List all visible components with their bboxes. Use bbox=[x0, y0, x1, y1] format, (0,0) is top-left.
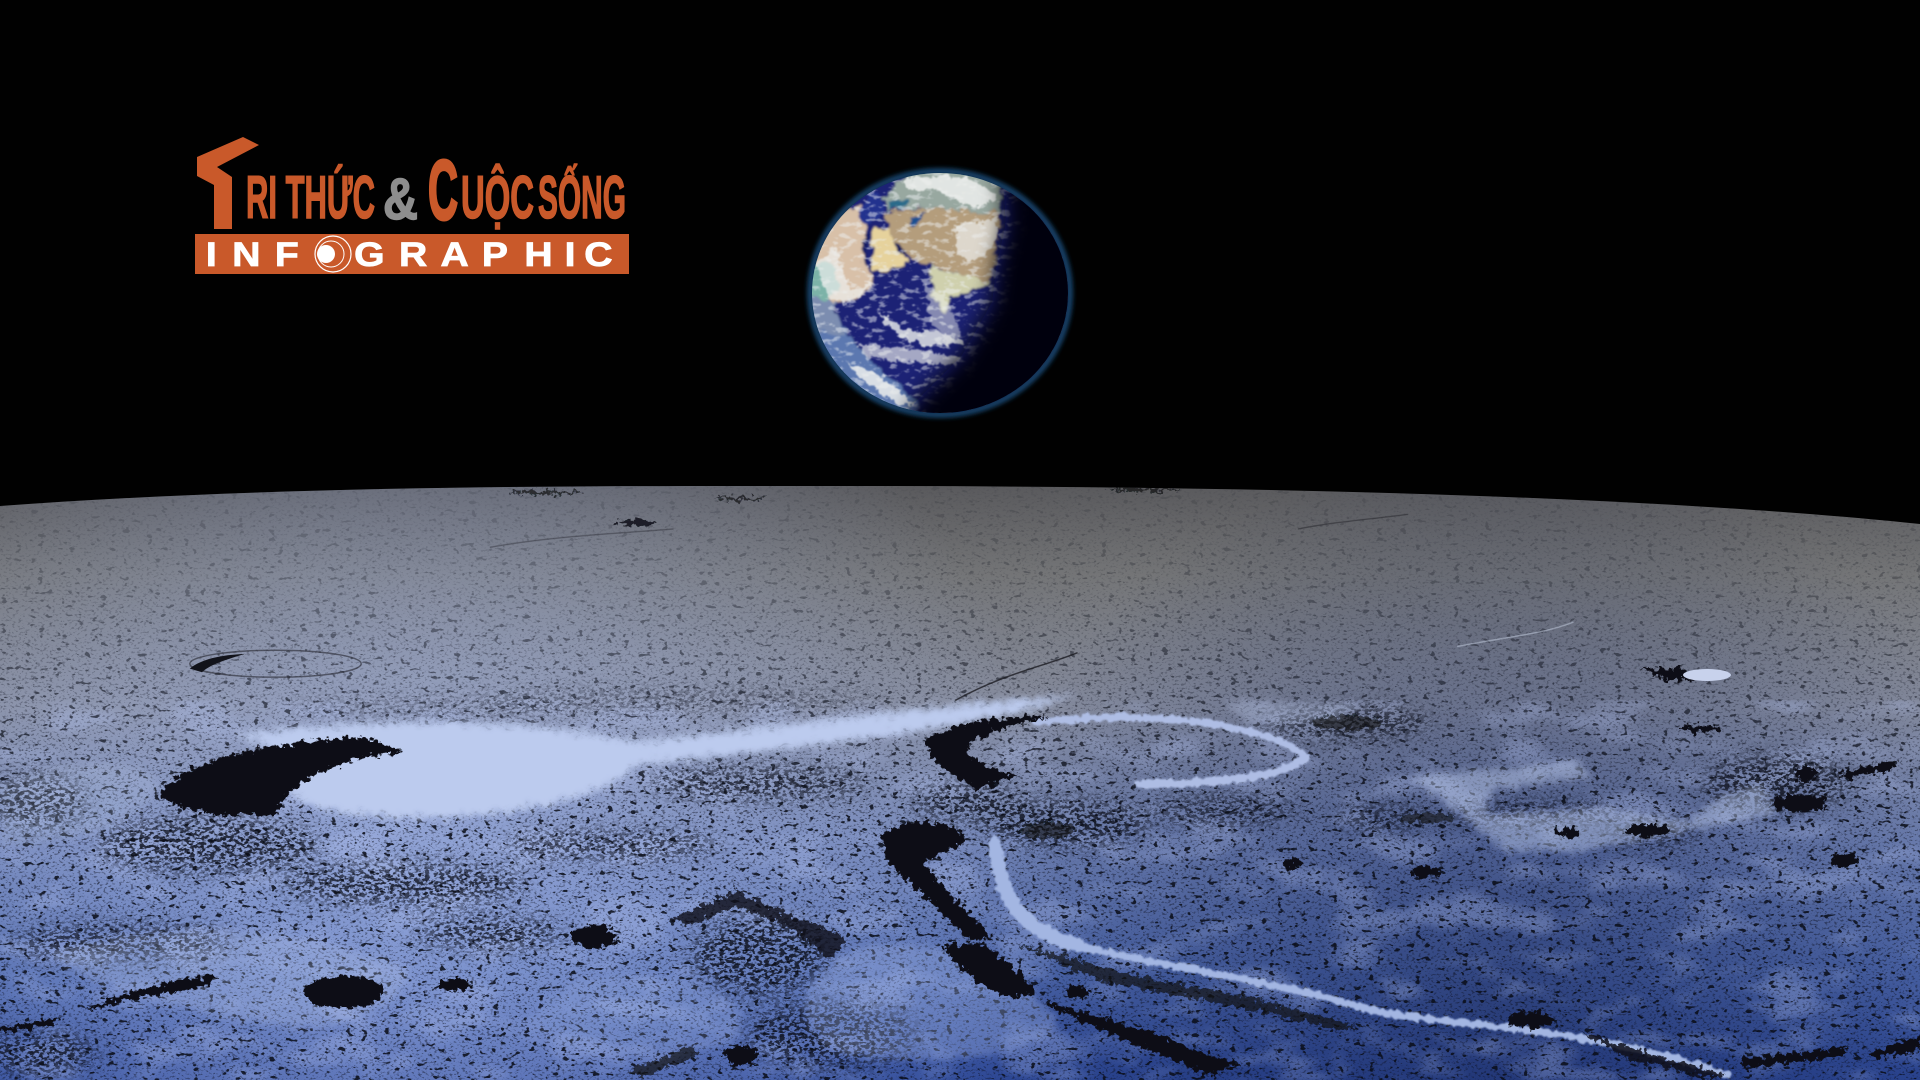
moon dark shadows bbox=[0, 488, 1920, 1078]
Africa bbox=[815, 202, 875, 304]
logo banner bbox=[195, 234, 629, 274]
Arabia bbox=[872, 227, 910, 272]
dark speckle clusters bbox=[0, 680, 1860, 1080]
icon: concentric O bbox=[315, 236, 351, 272]
India bbox=[930, 268, 990, 312]
logo heading: UỘC bbox=[461, 164, 534, 231]
logo heading: RI THỨC bbox=[246, 164, 375, 231]
logo heading: C bbox=[428, 143, 458, 237]
bright crater floor bbox=[1683, 669, 1731, 681]
cloud streaks bbox=[818, 176, 1000, 405]
Earth globe bbox=[804, 165, 1076, 421]
small crater ring bbox=[190, 514, 1573, 700]
Black Sea bbox=[887, 200, 910, 210]
logo: Tri thức & Cuộc sống Infographic: SỐNG bbox=[538, 164, 626, 231]
Red Sea bbox=[861, 233, 870, 265]
Persian Gulf bbox=[893, 240, 907, 255]
night side bbox=[905, 150, 1090, 440]
lunar surface bbox=[0, 470, 1920, 1080]
moon bright patches bbox=[0, 696, 1776, 1060]
atmosphere rim bbox=[810, 171, 1070, 415]
logo: Tri thức & Cuộc sống Infographic bbox=[195, 137, 629, 274]
Mediterranean bbox=[857, 193, 883, 223]
crater rim ridge bbox=[994, 717, 1727, 1075]
cloud texture bbox=[812, 173, 1068, 413]
moon surface speckle bbox=[0, 480, 1920, 1080]
Caspian bbox=[907, 210, 925, 230]
Asia bbox=[883, 208, 1000, 282]
banner text: INF bbox=[206, 235, 299, 273]
planet surface bbox=[812, 173, 1068, 413]
logo heading bbox=[246, 143, 626, 237]
logo heading: & bbox=[383, 167, 418, 232]
lighter limb ocean bbox=[819, 320, 920, 412]
logo T mark bbox=[197, 137, 259, 229]
banner text end: GRAPHIC bbox=[354, 235, 612, 273]
northern lands bbox=[880, 173, 1004, 216]
